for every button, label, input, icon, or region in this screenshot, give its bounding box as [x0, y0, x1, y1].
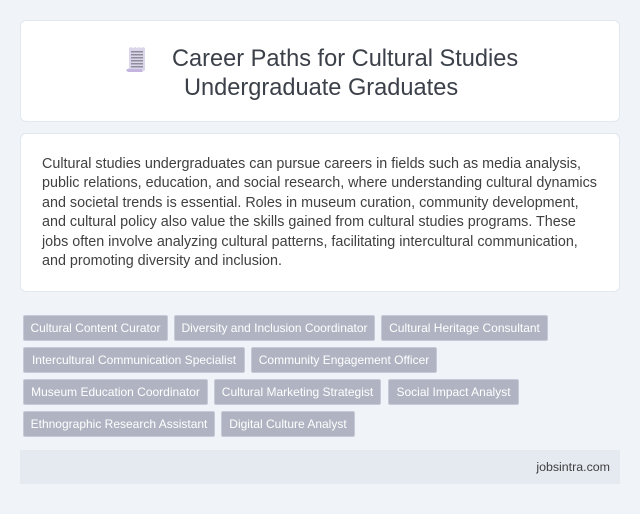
tag: Ethnographic Research Assistant — [31, 417, 207, 431]
tag: Community Engagement Officer — [259, 353, 429, 367]
description text: jobs often involve analyzing cultural patterns, facilitating intercultural communication, — [42, 234, 578, 250]
description text: public relations, education, and social research, where understanding cultural dynamics — [42, 175, 597, 191]
title: Undergraduate Graduates — [184, 75, 458, 101]
tag — [174, 315, 375, 341]
footer bar — [20, 450, 620, 484]
panel: description — [20, 133, 620, 292]
description text — [42, 156, 597, 269]
tag — [251, 347, 437, 373]
tag — [214, 379, 381, 405]
tag: Social Impact Analyst — [396, 385, 511, 399]
title: Career Paths for Cultural Studies — [172, 46, 518, 72]
icon: scroll document — [126, 47, 145, 72]
job tags — [23, 315, 548, 437]
tag: Museum Education Coordinator — [31, 385, 200, 399]
tag — [388, 379, 519, 405]
tag — [381, 315, 548, 341]
description text: and societal trends is essential. Roles in museum curation, community development, — [42, 195, 579, 211]
description text: Cultural studies undergraduates can pursue careers in fields such as media analysis, — [42, 156, 581, 172]
tag: Cultural Content Curator — [30, 321, 161, 335]
tag — [221, 411, 355, 437]
footer text: jobsintra.com — [536, 460, 610, 474]
tag: Intercultural Communication Specialist — [32, 353, 236, 367]
tag: Cultural Heritage Consultant — [389, 321, 540, 335]
tag: Digital Culture Analyst — [229, 417, 347, 431]
tag: Cultural Marketing Strategist — [222, 385, 373, 399]
tag — [23, 411, 215, 437]
tag — [23, 347, 245, 373]
tag: Diversity and Inclusion Coordinator — [181, 321, 368, 335]
tag — [23, 379, 208, 405]
title — [172, 46, 518, 101]
tag — [23, 315, 168, 341]
header panel — [20, 20, 620, 122]
description text: and cultural policy also value the skills gained from cultural studies programs. These — [42, 214, 576, 230]
description text: and promoting diversity and inclusion. — [42, 253, 282, 269]
